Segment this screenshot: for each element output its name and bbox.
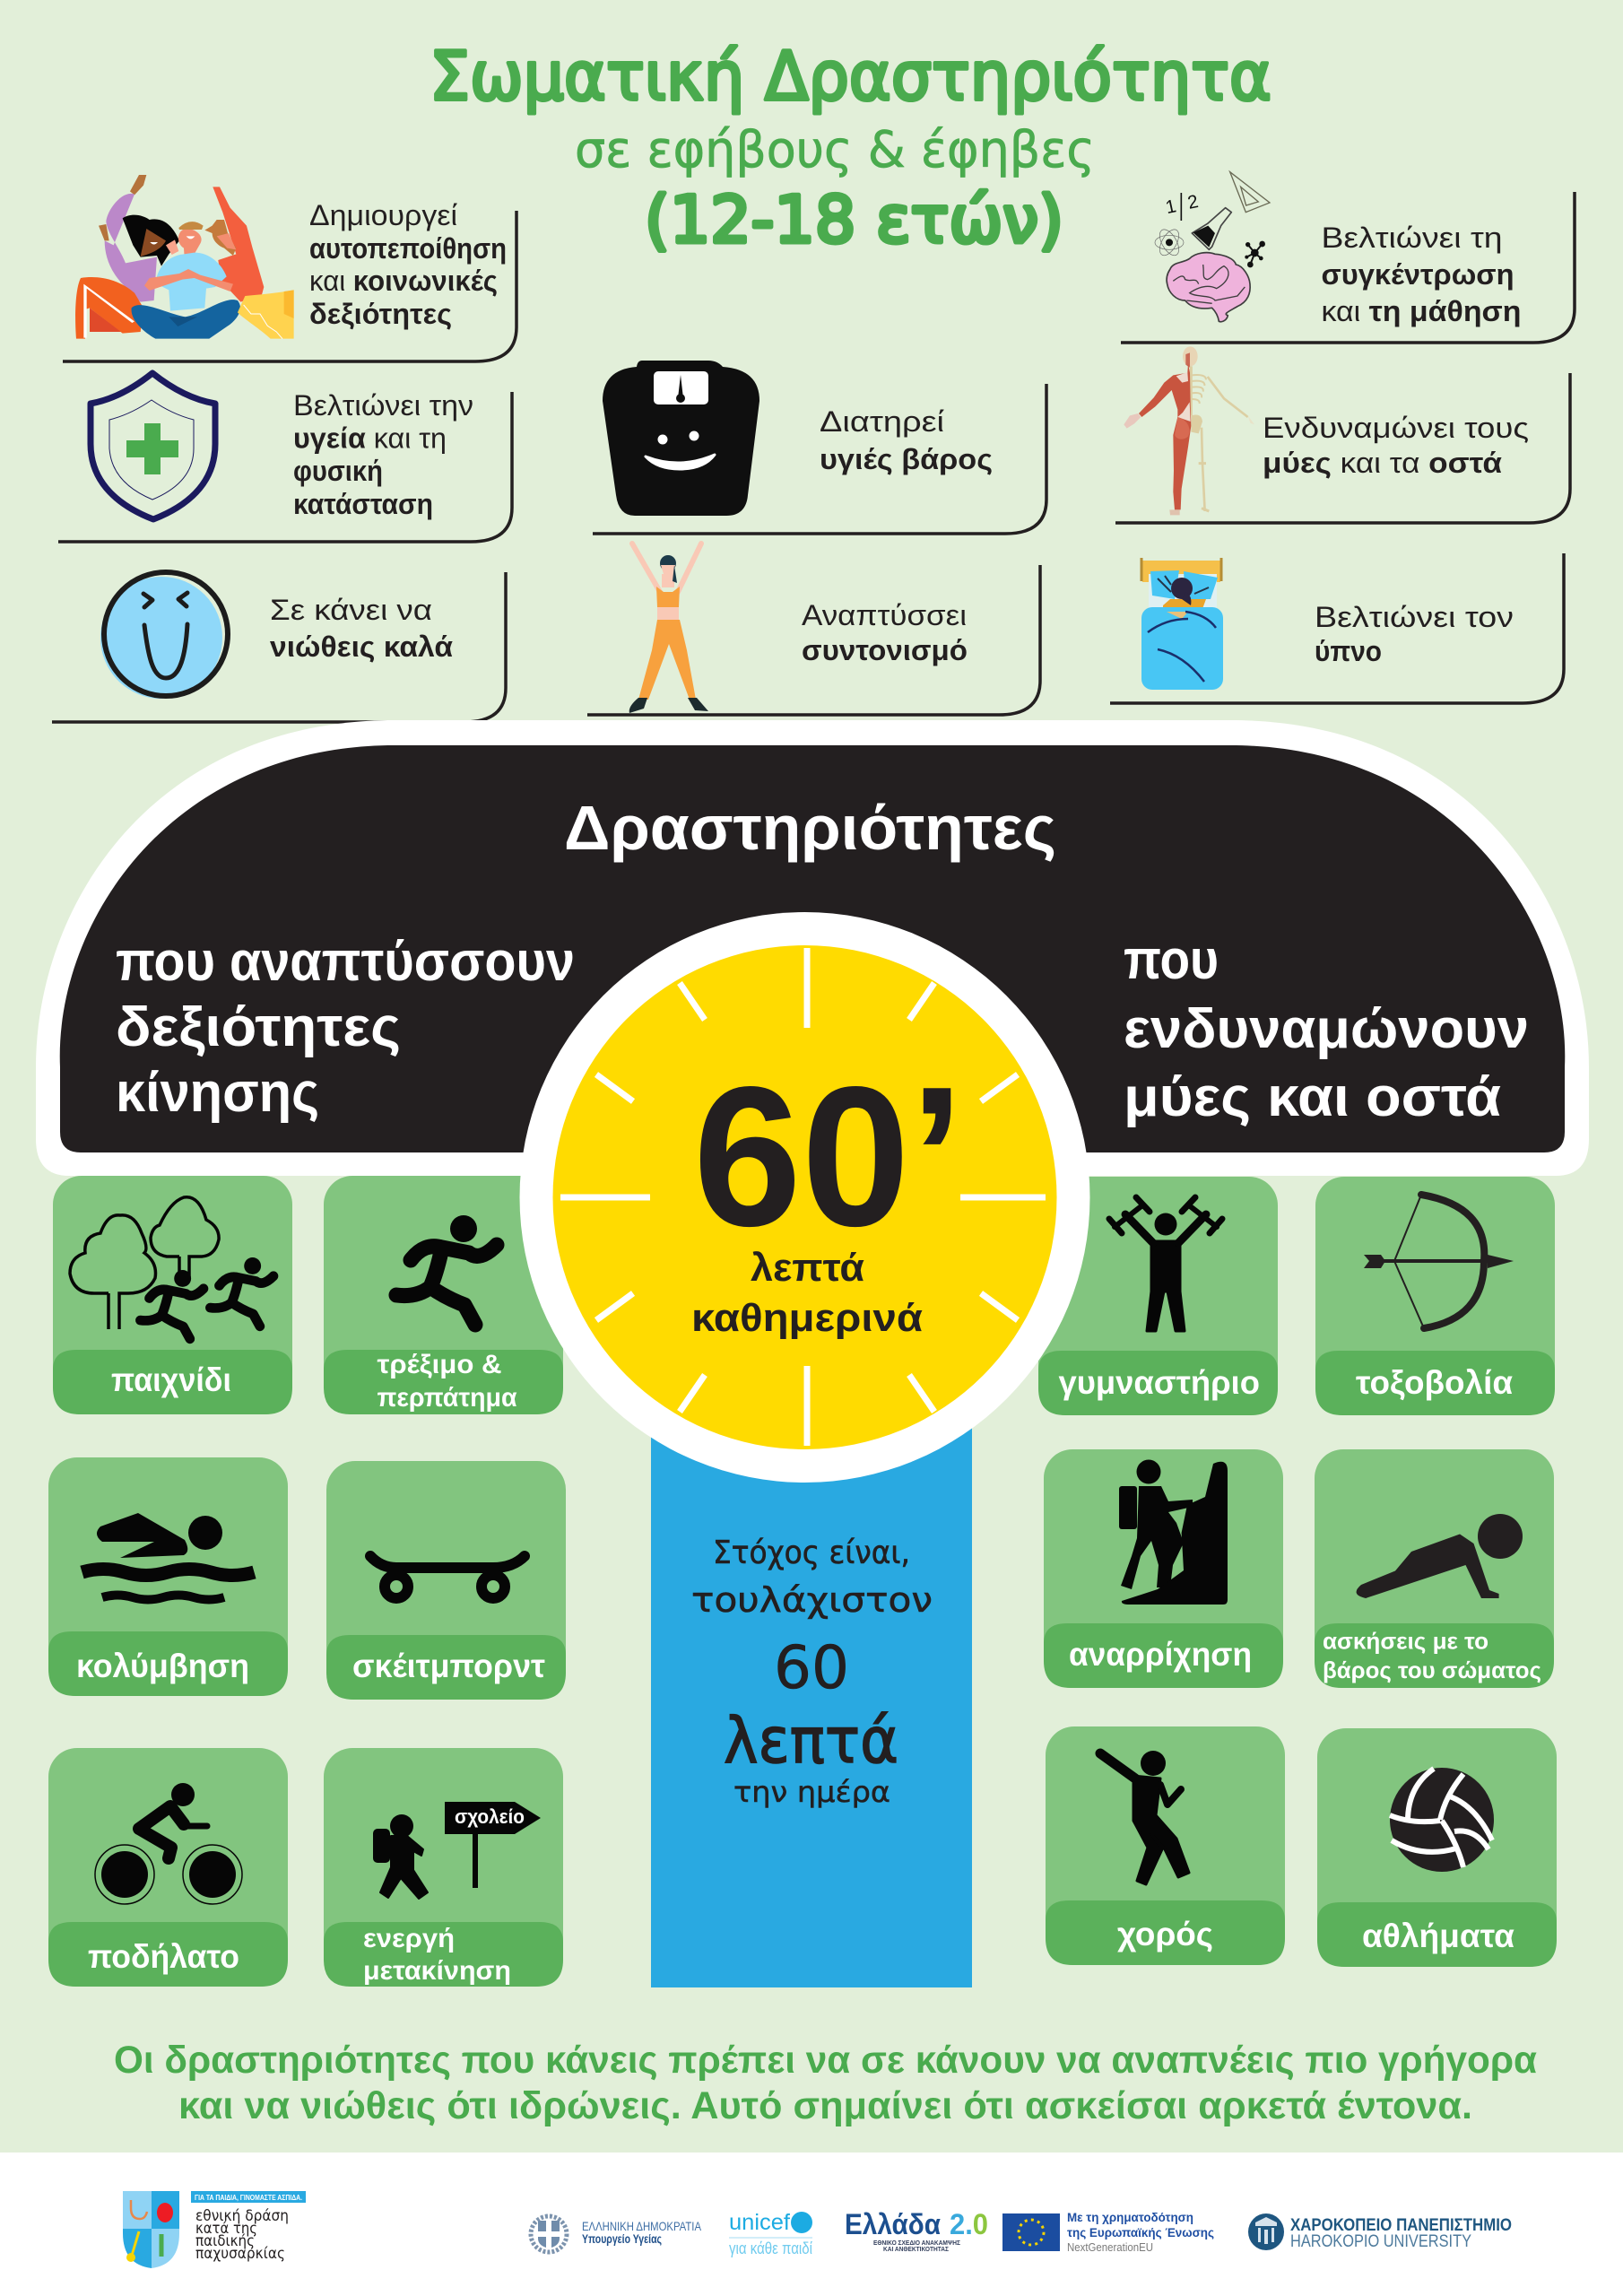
- goal text: Στόχος είναι,: [713, 1535, 910, 1571]
- clock caption: καθημερινά: [691, 1296, 923, 1340]
- label: περπάτημα: [377, 1383, 517, 1413]
- logo: national action: παιδικής: [195, 2232, 255, 2249]
- label: μετακίνηση: [363, 1956, 511, 1986]
- sign text: σχολείο: [455, 1805, 525, 1828]
- benefit card: weight: υγιές βάρος: [820, 443, 993, 475]
- label: βάρος του σώματος: [1323, 1657, 1541, 1683]
- label: αθλήματα: [1362, 1918, 1515, 1954]
- logo: national action: κατά της: [195, 2220, 257, 2237]
- label: [363, 1924, 511, 1986]
- label: σκέιτμπορντ: [352, 1648, 545, 1684]
- logo: national action: ΓΙΑ ΤΑ ΠΑΙΔΙΑ, ΓΙΝΟΜΑΣΤΕ ΑΣΠΙΔΑ.: [195, 2194, 302, 2202]
- left column text: που αναπτύσσουν: [116, 931, 575, 993]
- logo: national action: παχυσαρκίας: [195, 2245, 285, 2262]
- activity: bodyweight exercises: [1315, 1449, 1554, 1688]
- label: τοξοβολία: [1356, 1364, 1513, 1401]
- logo: national action: [123, 2191, 306, 2268]
- activity: archery: [1315, 1177, 1555, 1415]
- benefit text: Βελτιώνει την: [293, 389, 473, 422]
- benefit card: health: υγεία και τη: [293, 422, 447, 454]
- benefit text: Διατηρεί: [820, 405, 944, 438]
- main title: Σωματική Δραστηριότητα: [430, 37, 1271, 116]
- right column text: που: [1124, 929, 1219, 991]
- logo: Greece 2.0: ΕΘΝΙΚΟ ΣΧΕΔΙΟ ΑΝΑΚΑΜΨΗΣ: [873, 2239, 960, 2247]
- activity: play: [53, 1176, 292, 1414]
- logo: Harokopio University: HAROKOPIO UNIVERSITY: [1290, 2232, 1471, 2251]
- label: ασκήσεις με το: [1323, 1627, 1488, 1654]
- logo: ministry of health: Υπουργείο Υγείας: [582, 2231, 662, 2246]
- benefit card: feel good: [52, 572, 506, 722]
- icon: stretching woman: [629, 544, 708, 713]
- logo: EU funding: [1002, 2210, 1214, 2254]
- age range: (12-18 ετών): [645, 182, 1063, 257]
- benefit text: Δημιουργεί: [309, 199, 457, 231]
- logo: ministry of health: [531, 2216, 702, 2252]
- clock: 60 minutes: [520, 912, 1090, 1483]
- logo: unicef: [729, 2210, 812, 2257]
- logo: unicef: για κάθε παιδί: [729, 2239, 812, 2257]
- right column text: μύες και οστά: [1124, 1066, 1501, 1128]
- logo: EU funding: Με τη χρηματοδότηση: [1067, 2210, 1193, 2224]
- panel: white arch outline: [36, 720, 1589, 1176]
- left column text: [116, 931, 575, 1124]
- panel: daily goal: λεπτά: [724, 1704, 898, 1778]
- logo: Harokopio University: [1248, 2213, 1512, 2251]
- icon: shield with cross: [91, 373, 215, 519]
- benefit text: Σε κάνει να: [270, 594, 432, 626]
- label: τρέξιμο &: [377, 1350, 502, 1379]
- right column text: [1124, 929, 1529, 1128]
- label: χορός: [1117, 1916, 1213, 1952]
- activity: swimming: [48, 1457, 288, 1696]
- label: [377, 1350, 517, 1413]
- benefit card: confidence: αυτοπεποίθηση: [309, 232, 507, 265]
- footer band: [0, 2152, 1623, 2296]
- panel: daily goal: την ημέρα: [733, 1775, 890, 1809]
- activity: running and walking: [324, 1176, 563, 1414]
- logo: ministry of health: ΕΛΛΗΝΙΚΗ ΔΗΜΟΚΡΑΤΙΑ: [582, 2219, 702, 2233]
- logo: unicef: unicef: [729, 2210, 790, 2235]
- benefit card: coordination: συντονισμό: [802, 634, 968, 666]
- benefit card: health: [58, 373, 512, 542]
- icon: happy scale: [603, 361, 759, 516]
- icon: smiley: [100, 572, 228, 699]
- label: ποδήλατο: [88, 1938, 239, 1975]
- activity: cycling: [48, 1748, 288, 1987]
- icon: three friends: [75, 175, 294, 339]
- label: παιχνίδι: [111, 1361, 231, 1398]
- label: ενεργή: [363, 1924, 455, 1953]
- logo: Greece 2.0: 2.0: [950, 2208, 988, 2240]
- activity: gym: [1038, 1177, 1278, 1415]
- bottom message: Οι δραστηριότητες που κάνεις πρέπει να σε κάνουν να αναπνέεις πιο γρήγορα: [114, 2039, 1537, 2082]
- benefit text: Βελτιώνει τον: [1315, 601, 1514, 633]
- benefit card: muscles and bones: μύες και τα οστά: [1263, 447, 1502, 479]
- benefit card: health: κατάσταση: [293, 488, 433, 520]
- fraction text: 1 2: [1164, 191, 1200, 218]
- title block: [430, 37, 1271, 257]
- left column text: δεξιότητες: [116, 996, 401, 1058]
- activity: sports: [1317, 1728, 1557, 1967]
- logo: Harokopio University: ΧΑΡΟΚΟΠΕΙΟ ΠΑΝΕΠΙΣΤΗΜΙΟ: [1290, 2216, 1512, 2235]
- panel: daily goal: τουλάχιστον: [691, 1580, 933, 1620]
- label: γυμναστήριο: [1058, 1364, 1260, 1401]
- benefit text: Βελτιώνει τη: [1322, 222, 1503, 254]
- big number: 60’: [693, 1046, 964, 1268]
- benefit card: muscles and bones: [1115, 346, 1570, 523]
- bottom message: και να νιώθεις ότι ιδρώνεις. Αυτό σημαίνει ότι ασκείσαι αρκετά έντονα.: [178, 2084, 1472, 2127]
- subtitle: σε εφήβους & έφηβες: [575, 121, 1095, 179]
- benefit card: health: φυσική: [293, 455, 383, 487]
- activity: climbing: [1044, 1449, 1283, 1688]
- icon: anatomy figure: [1124, 346, 1254, 515]
- bottom message: [114, 2039, 1537, 2127]
- panel: daily goal: [651, 1399, 972, 1987]
- heading: Δραστηριότητες: [564, 793, 1056, 863]
- activity: skateboard: [326, 1461, 566, 1700]
- benefit card: sleep: ύπνο: [1315, 635, 1382, 667]
- panel: daily goal: 60: [774, 1633, 849, 1702]
- logo: Greece 2.0: [845, 2208, 988, 2253]
- benefit text: Ενδυναμώνει τους: [1263, 412, 1529, 444]
- logo: Greece 2.0: ΚΑΙ ΑΝΘΕΚΤΙΚΟΤΗΤΑΣ: [883, 2245, 949, 2253]
- benefit card: weight: [593, 361, 1046, 534]
- label: κολύμβηση: [76, 1648, 249, 1684]
- logo: national action: εθνική δράση: [195, 2207, 289, 2224]
- benefit card: confidence: δεξιότητες: [309, 298, 452, 330]
- left column text: κίνησης: [116, 1062, 319, 1124]
- benefit card: concentration: συγκέντρωση: [1322, 258, 1514, 291]
- benefit card: coordination: [587, 544, 1040, 715]
- clock caption: λεπτά: [751, 1246, 864, 1290]
- logo: EU funding: της Ευρωπαϊκής Ένωσης: [1067, 2225, 1214, 2239]
- benefit card: confidence: [63, 175, 516, 361]
- label: αναρρίχηση: [1069, 1636, 1252, 1673]
- benefit card: confidence: και κοινωνικές: [309, 265, 498, 297]
- logo: Greece 2.0: Ελλάδα: [845, 2208, 941, 2240]
- benefit card: sleep: [1110, 553, 1564, 703]
- benefit card: feel good: νιώθεις καλά: [270, 631, 453, 663]
- activity: active commuting: [324, 1748, 563, 1987]
- icon: brain and science: [1155, 172, 1270, 322]
- benefit card: concentration: και τη μάθηση: [1322, 295, 1521, 327]
- benefit text: Αναπτύσσει: [802, 599, 967, 631]
- panel: activities arch: [60, 745, 1565, 1152]
- benefit card: concentration: [1121, 172, 1575, 343]
- logo: EU funding: NextGenerationEU: [1067, 2240, 1153, 2254]
- activity: dance: [1046, 1726, 1285, 1965]
- label: [1323, 1627, 1541, 1683]
- right column text: ενδυναμώνουν: [1124, 998, 1529, 1060]
- clock caption: [691, 1246, 923, 1340]
- icon: person in bed: [1141, 558, 1223, 690]
